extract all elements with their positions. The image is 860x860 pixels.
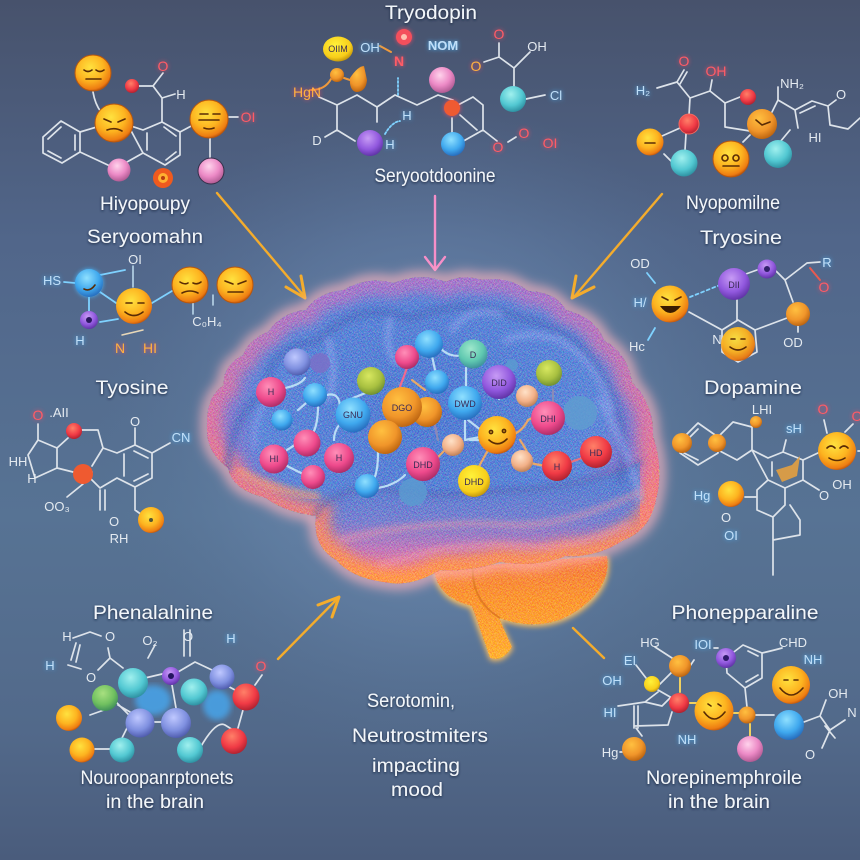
molecule: top centre: H [385,137,395,152]
molecule: bottom right: EI [624,653,636,668]
molecule: top left: OI [241,109,255,125]
ball labels: DHD [413,460,433,470]
muted blobs [310,353,597,506]
molecule: top centre: OH [527,39,547,54]
molecule: bottom left: O [183,629,193,644]
molecule: top right: O [679,53,690,69]
label: Seryoomahn: Seryoomahn [87,226,203,248]
molecule: left middle: O [33,407,44,423]
label: Tyosine: Tyosine [96,377,168,399]
molecule: top centre: HgN [293,84,321,100]
label: Seryootdoonine: Seryootdoonine [374,165,496,187]
molecule: right lower: O [819,488,829,503]
molecule: top centre: O [494,26,505,42]
molecule: left upper: OI [128,252,142,267]
molecule: right upper: N [712,332,722,347]
molecule: left middle: O [109,514,119,529]
molecule: left middle [9,405,190,546]
molecule: top centre: O [493,139,504,155]
molecule: right upper: OD [783,335,803,350]
molecule: top left: H [176,87,186,102]
molecule: left middle: HH [9,454,27,469]
molecule: top centre: OH [360,40,380,55]
brain [207,277,659,600]
arrow: top left to brain [217,193,305,298]
ball labels: H [554,462,560,472]
ball labels: DWD [454,399,476,409]
label: Tryosine: Tryosine [700,227,782,249]
balls [256,330,612,498]
ball labels: DHI [540,414,556,424]
molecule: left upper: HI [143,340,157,356]
molecule: bottom right: HG [640,635,660,650]
molecule: bottom left: H [226,631,236,646]
molecule: top right: O [836,87,846,102]
arrow: top right to brain [572,194,662,298]
molecule: right upper [629,255,832,362]
label: in the brain right: in the brain [668,791,770,813]
molecule: bottom left: O₂ [142,633,158,648]
label: central caption: Serotomin, [367,690,455,712]
brain stem and cerebellum [433,556,609,661]
molecule: bottom right: IOI [694,637,712,652]
molecule: left middle: H [27,471,37,486]
label: central caption: mood [391,779,443,801]
molecule: right upper: DII [728,280,740,290]
label: Nyopomilne: Nyopomilne [686,192,780,214]
molecule: right lower: sH [786,421,802,436]
label: central caption: Neutrostmiters [352,725,488,747]
molecule: bottom right: HI [604,705,616,720]
ball labels: DGO [392,403,412,413]
molecule: bottom right: Hg [602,745,618,760]
label: Nouroopanrptonets: Nouroopanrptonets [80,767,234,789]
molecule: bottom left: O [256,658,267,674]
molecule: top right: OH [706,63,726,79]
molecule: right lower: Hg [694,488,710,503]
molecule: left upper: N [115,340,125,356]
label: Tryodopin: Tryodopin [385,2,477,24]
label: Hiyopoupy: Hiyopoupy [100,193,190,215]
smiley on ball [489,429,507,444]
molecule: bottom right: OH [602,673,622,688]
connecting bonds [283,350,582,488]
molecule: top right: NH₂ [780,76,804,91]
brain gyri folds [228,307,640,566]
molecule: right lower: O [721,510,731,525]
molecule: right upper: Hc [629,339,645,354]
molecule: top centre: Cl [550,88,562,103]
molecule: left middle: OO₃ [44,499,70,514]
molecule: left middle: RH [110,531,128,546]
label: in the brain left: in the brain [106,791,204,813]
molecule: bottom right: OH [828,686,848,701]
ball labels: H [336,453,342,463]
ball labels [268,350,603,487]
arrow: top centre to brain [425,196,445,270]
brain edge colour [207,277,659,584]
label: central caption: impacting [372,755,460,777]
ball labels: HI [270,454,278,464]
molecule: bottom right: CHD [779,635,807,650]
arrow: bottom left to brain [278,597,339,659]
molecule: bottom left: O [86,670,96,685]
molecule: bottom left [45,629,267,763]
molecule: right lower: O [818,401,829,417]
label: Phonepparaline: Phonepparaline [672,602,818,624]
molecule: right upper: H/ [634,295,647,310]
ball labels: HD [590,448,603,458]
arrow: bottom right line [573,628,604,658]
label: Dopamine: Dopamine [704,377,802,399]
molecule: left middle: .AII [49,405,69,420]
molecule: top centre: NOM [428,38,458,53]
ball labels: DHD [464,477,484,487]
molecule: bottom right: NH [804,652,822,667]
molecule: top right: HI [808,130,822,145]
label: central caption [352,690,488,801]
molecule: bottom right [602,635,857,762]
ball labels: H [268,387,274,397]
molecule: bottom right: N [847,705,857,720]
molecule: left upper: HS [43,273,61,288]
molecule: top centre: N [394,53,404,69]
molecule: right upper: OD [630,256,650,271]
molecule: right upper: R [822,255,832,270]
molecule: left upper: C₀H₄ [192,314,222,329]
molecule: top centre: H [402,108,412,123]
molecule: bottom left: O [105,629,115,644]
label: Norepinemphroile: Norepinemphroile [646,767,802,789]
molecule: top centre: OIIM [328,44,348,54]
label: Phenalalnine: Phenalalnine [93,602,213,624]
molecule: top centre: OI [543,135,557,151]
molecule: right lower: OI [724,528,738,543]
brain lower lobe [317,462,640,584]
molecule: top centre: O [519,125,530,141]
molecule: left upper [43,252,253,356]
ball labels: DID [491,378,507,388]
molecule: bottom right: NH [678,732,696,747]
molecule: right lower: LHI [752,402,772,417]
molecule: bottom left: H [62,629,72,644]
ball labels: D [470,350,477,360]
molecule: top centre [293,26,562,156]
molecule: top centre: D [312,133,322,148]
brain molecules network [256,330,612,506]
molecule: right upper: O [819,279,830,295]
molecule: left upper: H [75,333,85,348]
molecule: top right [636,53,860,177]
molecule: bottom left: H [45,658,55,673]
molecule: top right: H₂ [636,83,650,98]
molecule: right lower [672,401,860,575]
molecule: left middle: CN [172,430,190,445]
molecule: bottom right: O [805,747,815,762]
ball labels: GNU [343,410,363,420]
molecule: left middle: O [130,414,140,429]
molecule: top left: O [158,58,169,74]
molecule: right lower: OH [832,477,852,492]
molecule: top centre: O [471,58,482,74]
molecule: top left [43,55,255,188]
